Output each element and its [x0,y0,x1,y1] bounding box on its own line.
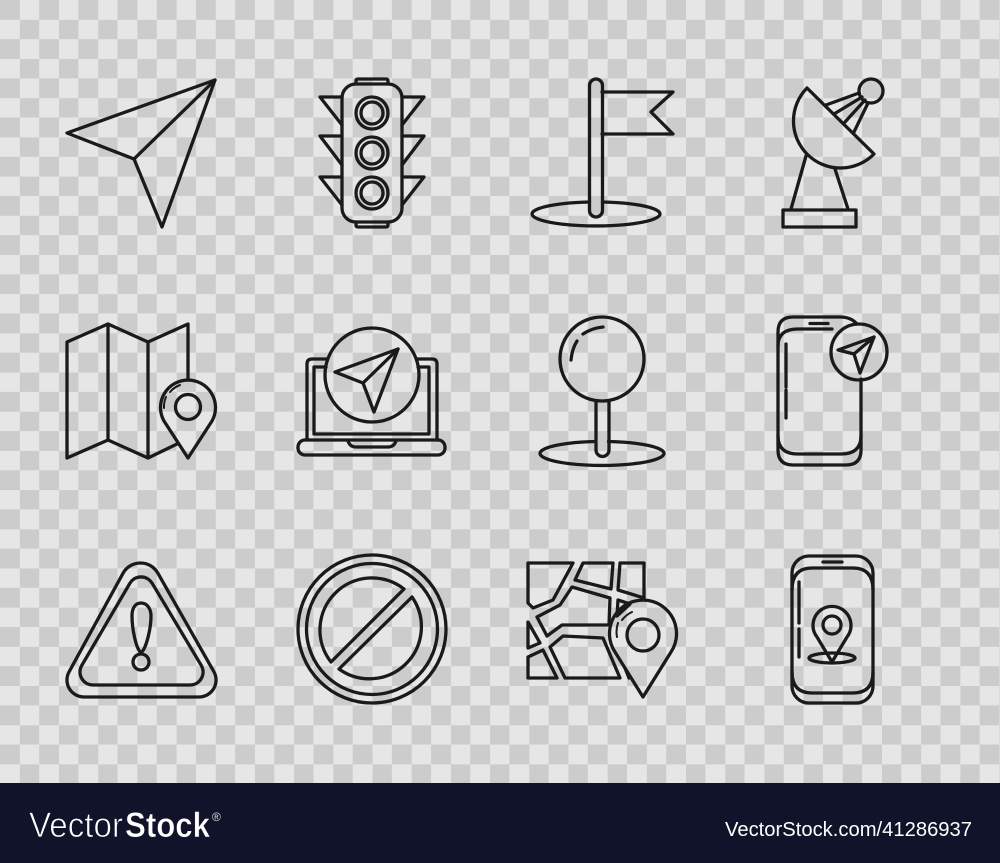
image id caption: VectorStock.com/41286937 [725,819,972,841]
icon: warning triangle [67,563,216,697]
icon: traffic light [320,79,424,227]
logo: VectorStock [29,806,221,845]
logo: VectorStock: Stock [125,806,210,845]
icon: folded map with pin [67,324,216,458]
icon: laptop with navigation arrow [298,328,445,455]
footer bar [0,783,1000,863]
icon: street map with pin [528,563,676,697]
icon: navigation arrow [67,80,215,227]
icon: satellite dish [783,79,883,227]
logo: VectorStock: Vector [29,806,123,845]
icon: flag on ground [532,79,673,226]
icon: prohibition sign [298,555,446,703]
logo: VectorStock: ® [212,810,221,824]
icon: smartphone with location pin [792,556,873,703]
icon: round location pin [540,317,664,465]
icon: smartphone with navigation arrow [778,317,887,465]
